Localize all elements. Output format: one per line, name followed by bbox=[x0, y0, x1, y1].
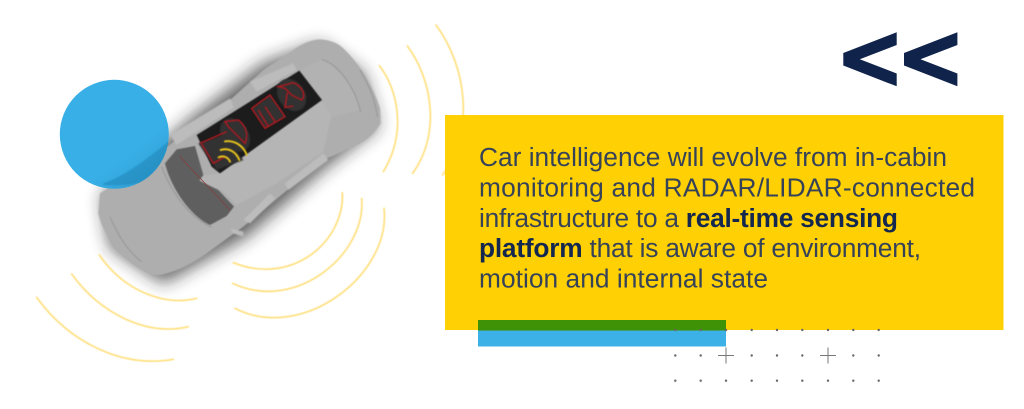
line 4: platform that is aware of environment, bbox=[479, 233, 921, 263]
double chevron icon bbox=[843, 32, 957, 86]
wave 3 bbox=[37, 297, 173, 361]
dashboard detail bbox=[180, 157, 230, 210]
windshield bbox=[165, 146, 234, 225]
chevron left bbox=[843, 32, 897, 86]
line 2: monitoring and RADAR/LIDAR-connected bbox=[479, 172, 975, 202]
seat outlines in red bbox=[200, 83, 304, 163]
line 5: motion and internal state bbox=[479, 263, 768, 293]
side sensing waves bbox=[233, 193, 384, 318]
front sensing waves bbox=[379, 25, 463, 175]
wave 1 bbox=[233, 193, 342, 269]
wave 3 bbox=[235, 208, 384, 318]
wave 1 bbox=[379, 66, 398, 172]
chevron right bbox=[904, 32, 957, 86]
body text bbox=[479, 142, 975, 293]
car shadow bbox=[102, 43, 378, 283]
roof bbox=[198, 100, 332, 205]
line 1: Car intelligence will evolve from in-cabin bbox=[479, 142, 947, 172]
rear window bbox=[300, 60, 360, 117]
wave 1 bbox=[99, 255, 197, 300]
wave 3 bbox=[436, 25, 463, 175]
green accent bar bbox=[478, 320, 726, 330]
rear sensing waves bbox=[37, 255, 197, 361]
wave 2 bbox=[72, 274, 188, 329]
seats bbox=[198, 73, 313, 170]
blue accent bar bbox=[478, 330, 726, 346]
car body bbox=[98, 39, 381, 275]
dot grid with plus marks bbox=[674, 329, 880, 382]
wave 2 bbox=[407, 46, 430, 173]
body crease lines bbox=[110, 59, 377, 262]
in-cabin sensing waves bbox=[219, 141, 247, 162]
yellow text panel bbox=[445, 115, 1004, 330]
blue circle bbox=[60, 80, 169, 189]
line 3: infrastructure to a real-time sensing bbox=[479, 203, 898, 233]
car illustration bbox=[37, 25, 463, 361]
side mirror and door trim bbox=[170, 63, 328, 237]
wave 2 bbox=[233, 198, 362, 291]
cabin interior bbox=[197, 71, 322, 173]
